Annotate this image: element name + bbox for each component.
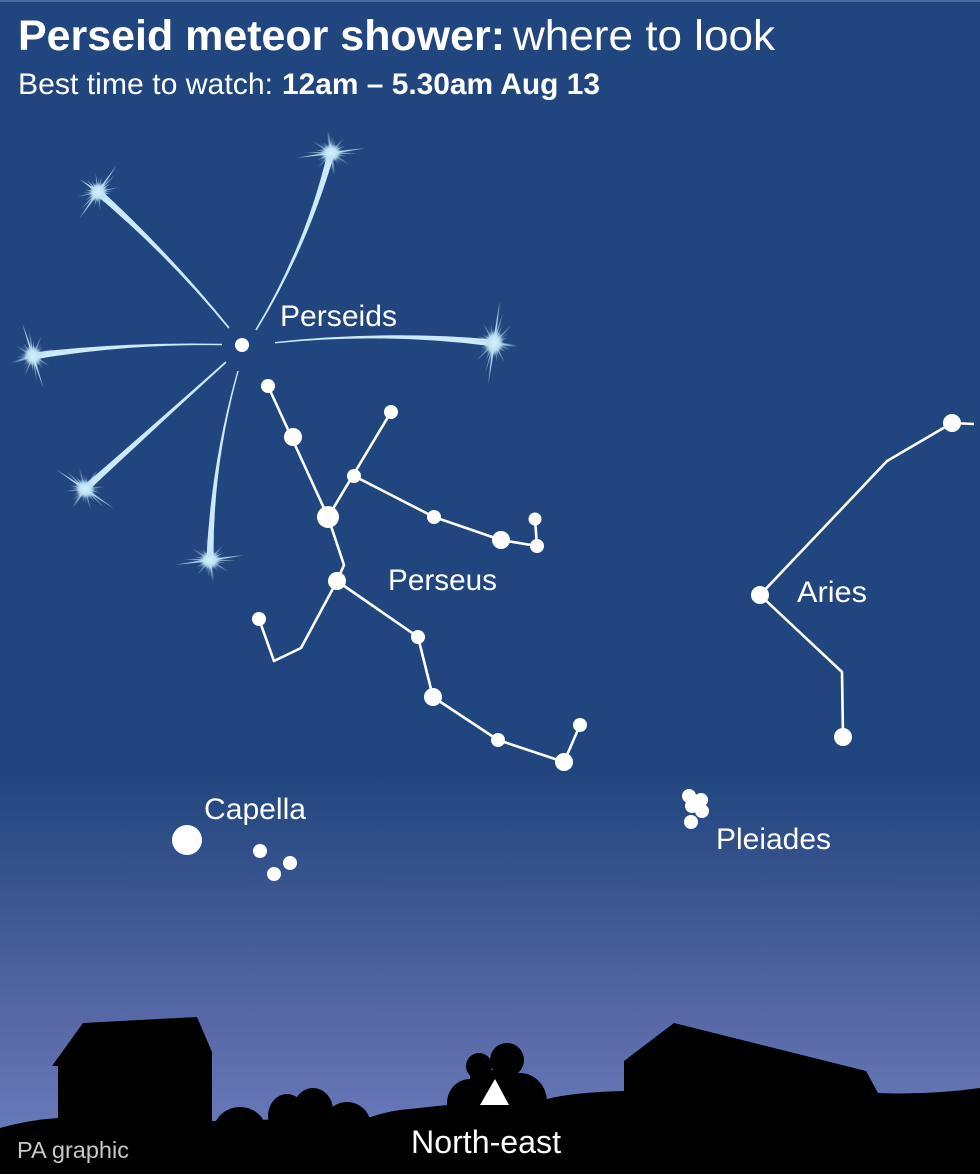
constellation: Perseus [252,379,587,771]
ground and buildings [0,1017,980,1174]
title: Perseid meteor shower: [18,12,505,60]
title: where to look [512,12,775,60]
star cluster: Pleiades [682,789,709,829]
meteor: bottom [173,371,247,587]
constellation: Aries [751,414,974,746]
meteor: top-left [61,152,230,329]
label: Aries: Aries [797,576,867,609]
radiant point [235,338,249,352]
meteor: left [1,316,222,396]
label: Pleiades: Pleiades [716,823,831,856]
meteor: right [275,298,523,388]
skyline silhouette [0,1017,980,1174]
subtitle: best time to watch: 12am – 5.30am Aug 13 [282,68,600,101]
label: Capella: Capella [204,793,306,826]
subtitle: best time to watch: Best time to watch: [18,68,273,101]
direction marker triangle [480,1079,509,1105]
credit: PA graphic: PA graphic [17,1137,129,1163]
bushes [213,1107,267,1159]
meteor: lower-left [44,361,227,527]
tree [466,1053,492,1079]
label: Perseus: Perseus [388,564,497,597]
label: North-east: North-east [411,1124,561,1160]
meteor: top [255,126,368,330]
star: Capella group [172,825,297,881]
Perseids meteors radiating from radiant [1,126,523,587]
label: Perseids: Perseids [280,300,397,333]
